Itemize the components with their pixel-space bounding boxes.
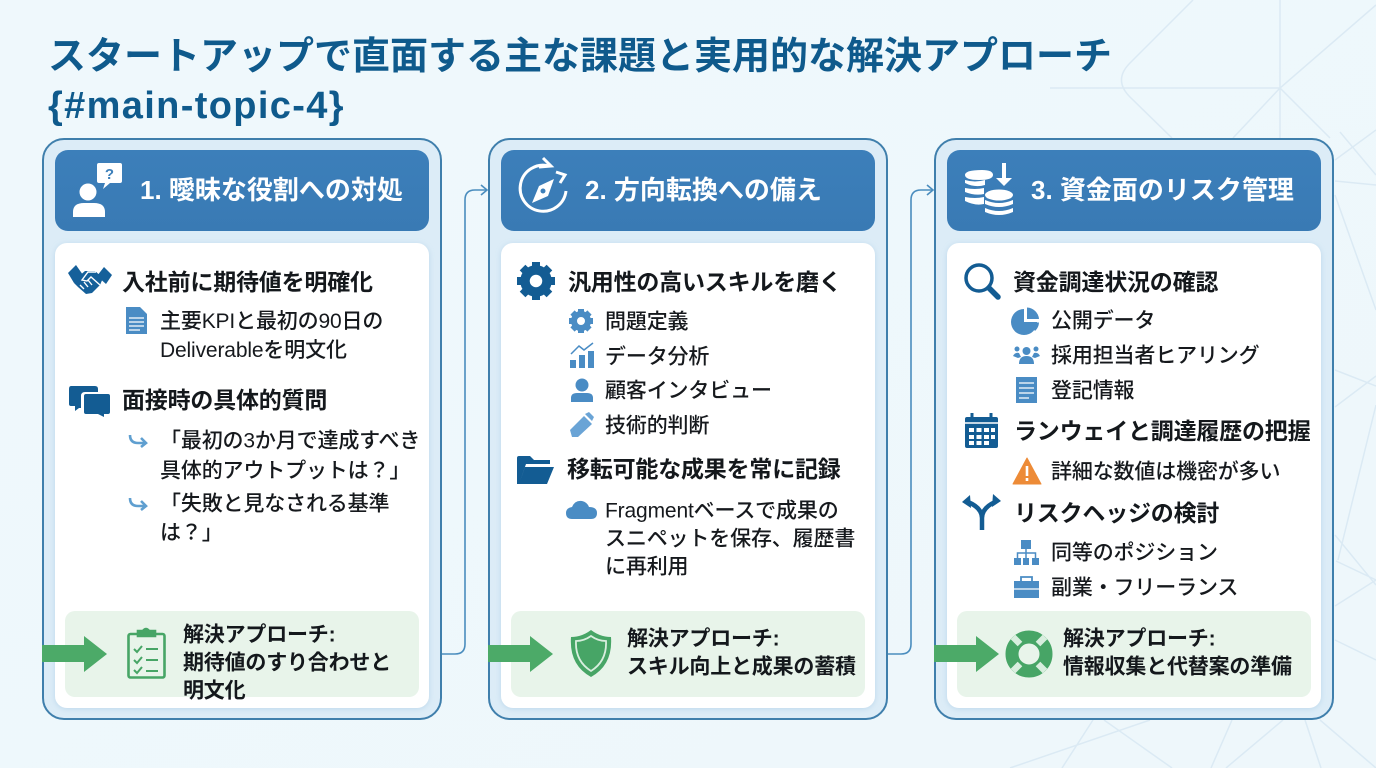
item: interview questions: 面接時の具体的質問 bbox=[122, 387, 327, 413]
icon: coin stacks bbox=[965, 163, 1013, 215]
item: funding status: 登記情報 bbox=[1051, 380, 1135, 402]
icon: hooked arrow bbox=[130, 498, 146, 510]
icon: calendar bbox=[965, 413, 998, 448]
icon: hooked arrow bbox=[130, 435, 146, 447]
item: clarify expectations: 主要KPIと最初の90日の bbox=[160, 310, 383, 333]
item: funding status bbox=[966, 265, 1260, 403]
item: record outcomes: Fragmentベースで成果の bbox=[605, 500, 839, 522]
panel: 3 funding risk bbox=[934, 139, 1333, 719]
panel header bbox=[947, 150, 1321, 231]
icon: person with question bubble: ? bbox=[105, 166, 114, 183]
icon: shield bbox=[571, 630, 611, 677]
item: record outcomes: 移転可能な成果を常に記録 bbox=[567, 456, 841, 482]
icon: cloud bbox=[566, 501, 597, 519]
item: versatile skills bbox=[509, 254, 842, 438]
panel header bbox=[55, 150, 429, 231]
panel: 1 ambiguous roles bbox=[42, 139, 441, 719]
white content card bbox=[55, 243, 429, 708]
icon: clipboard checklist bbox=[128, 629, 164, 678]
icon: compass with rotating arrows bbox=[520, 158, 566, 211]
item: risk hedge: リスクヘッジの検討 bbox=[1014, 500, 1219, 526]
item: interview questions bbox=[69, 386, 420, 544]
icon: usb stick bbox=[570, 412, 594, 437]
item: versatile skills: 汎用性の高いスキルを磨く bbox=[568, 269, 842, 295]
icon: org chart bbox=[1014, 540, 1039, 565]
heading: 1. 曖昧な役割への対処 bbox=[140, 175, 403, 205]
solution box bbox=[65, 611, 419, 702]
solution box: 解決アプローチ: bbox=[1063, 628, 1215, 650]
arrow: solution 1 bbox=[42, 636, 107, 672]
icon: gear bbox=[509, 254, 563, 308]
icon: pie chart bbox=[1011, 308, 1039, 335]
heading: 2. 方向転換への備え bbox=[585, 175, 822, 205]
item: record outcomes: スニペットを保存、履歴書 bbox=[605, 528, 855, 550]
white content card bbox=[488, 243, 875, 708]
arrow: connector 2 to 3 bbox=[888, 185, 933, 654]
item: versatile skills: 顧客インタビュー bbox=[605, 380, 772, 402]
icon: folder bbox=[517, 456, 554, 484]
item: record outcomes: に再利用 bbox=[605, 556, 688, 578]
item: versatile skills: 技術的判断 bbox=[605, 414, 709, 438]
panel header bbox=[501, 150, 875, 231]
icon: document bbox=[126, 307, 147, 334]
item: versatile skills: データ分析 bbox=[605, 344, 709, 368]
solution box: 情報収集と代替案の準備 bbox=[1063, 656, 1292, 678]
icon: briefcase bbox=[1014, 577, 1039, 598]
item: risk hedge: 副業・フリーランス bbox=[1051, 576, 1238, 600]
icon: fork arrows bbox=[962, 494, 1001, 530]
solution box bbox=[957, 611, 1311, 697]
title: スタートアップで直面する主な課題と実用的な解決アプローチ bbox=[48, 36, 1112, 78]
title bbox=[48, 36, 1112, 127]
title: {#main-topic-4} bbox=[48, 85, 345, 127]
arrow: solution 3 bbox=[934, 636, 999, 672]
item: interview questions: は？」 bbox=[160, 522, 223, 544]
solution box: 期待値のすり合わせと bbox=[183, 652, 391, 674]
item: risk hedge: 同等のポジション bbox=[1051, 542, 1218, 564]
icon: life ring bbox=[1012, 637, 1046, 671]
item: record outcomes bbox=[517, 456, 855, 578]
item: interview questions: 「最初の3か月で達成すべき bbox=[160, 430, 420, 452]
item: clarify expectations: Deliverableを明文化 bbox=[160, 339, 347, 362]
heading: 3. 資金面のリスク管理 bbox=[1031, 175, 1294, 205]
item: versatile skills: 問題定義 bbox=[605, 310, 689, 334]
icon: warning triangle bbox=[1013, 458, 1041, 484]
white content card bbox=[934, 243, 1321, 708]
arrow: connector 1 to 2 bbox=[441, 185, 487, 654]
icon: person bbox=[571, 378, 593, 402]
item: runway bbox=[965, 413, 1311, 484]
item: runway: 詳細な数値は機密が多い bbox=[1051, 460, 1280, 484]
solution box: スキル向上と成果の蓄積 bbox=[627, 654, 856, 678]
solution box: 解決アプローチ: bbox=[183, 624, 335, 646]
solution box: 解決アプローチ: bbox=[627, 628, 779, 650]
item: interview questions: 具体的アウトプットは？」 bbox=[160, 460, 410, 482]
icon: people group bbox=[1013, 346, 1040, 364]
icon: person with question bubble bbox=[73, 163, 122, 217]
arrow: solution 2 bbox=[488, 636, 553, 672]
panel: 2 pivot readiness bbox=[488, 139, 1333, 719]
icon: speech bubbles bbox=[69, 386, 110, 417]
icon: bar chart bbox=[570, 343, 594, 368]
item: funding status: 公開データ bbox=[1051, 308, 1155, 332]
item: risk hedge bbox=[962, 494, 1238, 600]
item: funding status: 採用担当者ヒアリング bbox=[1051, 344, 1260, 368]
item: clarify expectations: 入社前に期待値を明確化 bbox=[122, 269, 373, 295]
item: runway: ランウェイと調達履歴の把握 bbox=[1014, 418, 1311, 444]
item: clarify expectations bbox=[68, 265, 383, 362]
icon: registry document bbox=[1016, 377, 1037, 403]
icon: small gear bbox=[564, 304, 598, 338]
item: funding status: 資金調達状況の確認 bbox=[1013, 269, 1218, 295]
icon: magnifier bbox=[966, 265, 998, 297]
solution box bbox=[511, 611, 865, 697]
icon: handshake bbox=[68, 265, 112, 294]
item: interview questions: 「失敗と見なされる基準 bbox=[160, 492, 389, 516]
solution box: 明文化 bbox=[183, 680, 246, 702]
